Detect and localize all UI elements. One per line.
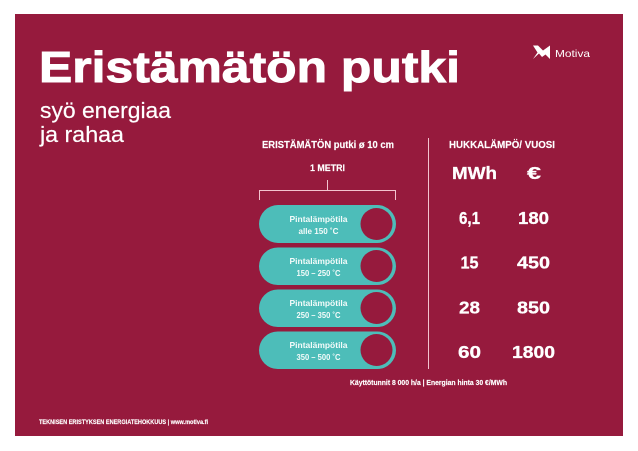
values row 4 xyxy=(458,342,555,362)
footer: TEKNISEN ERISTYKSEN ENERGIATEHOKKUUS | www.motiva.fi xyxy=(39,420,208,426)
pipe 1: alle 150 ˚C xyxy=(298,226,338,236)
divider xyxy=(428,138,430,369)
label: one metre: 1 METRI xyxy=(310,163,345,174)
values row 2 xyxy=(460,252,550,272)
logo wordmark: Motiva xyxy=(555,48,590,60)
bracket: one metre span xyxy=(260,180,396,200)
values row 3: 28 xyxy=(459,298,480,318)
values row 1: 6,1 xyxy=(459,208,480,228)
footnote: Käyttötunnit 8 000 h/a | Energian hinta 30 €/MWh xyxy=(350,380,507,387)
pipe 4 xyxy=(259,332,396,369)
column header: euro: € xyxy=(527,163,541,183)
values row 4: 1800 xyxy=(512,342,555,362)
pipe 1: Pintalämpötila xyxy=(290,214,348,224)
pipe 3 xyxy=(259,290,396,327)
values row 4: 60 xyxy=(458,342,481,362)
pipe 3: 250 – 350 ˚C xyxy=(296,310,340,320)
subtitle: ja rahaa xyxy=(39,122,125,147)
title: Eristämätön putki xyxy=(39,43,460,92)
pipe 2 xyxy=(259,248,396,285)
subtitle xyxy=(39,98,172,147)
logo: Motiva xyxy=(533,46,590,60)
values row 3 xyxy=(459,298,550,318)
heading: heat loss per year: HUKKALÄMPÖ/ VUOSI xyxy=(449,138,555,151)
pipe 2: Pintalämpötila xyxy=(290,256,348,266)
pipe 2: 150 – 250 ˚C xyxy=(296,268,340,278)
subtitle: syö energiaa xyxy=(40,98,172,123)
pipe 4: Pintalämpötila xyxy=(290,340,348,350)
values row 3: 850 xyxy=(517,298,550,318)
pipe 4: 350 – 500 ˚C xyxy=(296,352,340,362)
values row 1: 180 xyxy=(518,208,549,228)
values row 1 xyxy=(459,208,549,228)
column header: MWh: MWh xyxy=(452,163,497,183)
pipe 1 xyxy=(259,205,396,243)
values row 2: 15 xyxy=(460,252,479,272)
heading: pipe column: ERISTÄMÄTÖN putki ø 10 cm xyxy=(262,138,394,151)
values row 2: 450 xyxy=(517,252,550,272)
icon: Motiva mark xyxy=(533,46,550,59)
pipe 3: Pintalämpötila xyxy=(290,298,348,308)
